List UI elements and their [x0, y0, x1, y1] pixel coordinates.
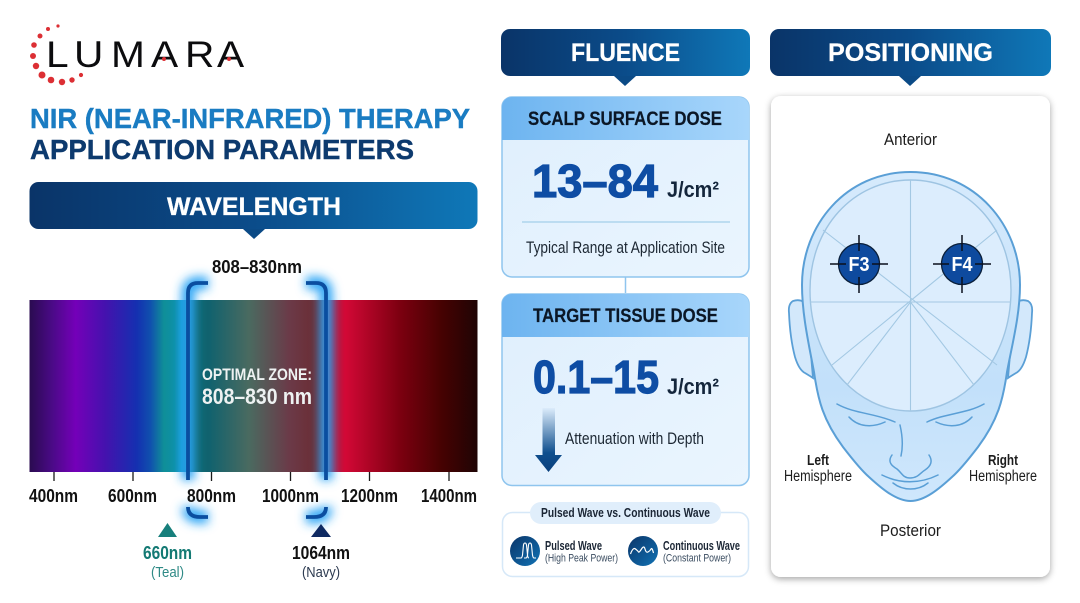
optimal zone label: OPTIMAL ZONE: [202, 365, 312, 384]
panel: pulsed vs continuous wave: (Constant Power) [663, 552, 731, 564]
panel: pulsed vs continuous wave: Continuous Wave [663, 538, 740, 553]
panel: scalp surface dose: J/cm² [667, 177, 719, 202]
range label: 808–830nm [212, 257, 302, 277]
marker: 1064nm navy [292, 524, 350, 581]
axis ticks and labels [29, 472, 477, 506]
title: NIR (NEAR-INFRARED) THERAPY [30, 103, 470, 134]
panel: scalp surface dose [502, 97, 749, 277]
panel: pulsed vs continuous wave: Pulsed Wave vs. Continuous Wave [541, 505, 710, 520]
marker: F4: F4 [952, 254, 973, 276]
label: left hemisphere: Left [807, 452, 829, 469]
axis ticks and labels: 1000nm [262, 486, 319, 506]
marker: 660nm teal: (Teal) [151, 564, 184, 581]
panel: scalp surface dose: 13–84 [532, 155, 658, 207]
panel: target tissue dose: Attenuation with Depth [565, 430, 704, 448]
spectrum bar [30, 300, 478, 472]
banner: fluence: FLUENCE [571, 39, 680, 67]
panel: target tissue dose: TARGET TISSUE DOSE [533, 306, 718, 327]
logo: Lumara: LUMARA [46, 35, 244, 76]
panel: pulsed vs continuous wave: (High Peak Power) [545, 552, 618, 564]
panel: target tissue dose [502, 294, 749, 486]
panel: scalp surface dose: SCALP SURFACE DOSE [528, 109, 722, 130]
marker: 660nm teal: 660nm [143, 543, 192, 563]
panel: pulsed vs continuous wave [502, 502, 748, 576]
icon: pulsed wave [510, 536, 540, 566]
banner: fluence [501, 29, 750, 86]
panel: target tissue dose: J/cm² [667, 374, 719, 399]
panel: positioning head diagram: Anterior [884, 130, 937, 149]
marker: F3 [830, 235, 888, 293]
label: left hemisphere [784, 452, 852, 485]
banner: wavelength [30, 182, 478, 239]
panel: positioning head diagram [771, 96, 1050, 577]
title [30, 103, 470, 165]
axis ticks and labels: 1400nm [421, 486, 477, 506]
label: left hemisphere: Hemisphere [784, 468, 852, 485]
axis ticks and labels: 800nm [187, 486, 236, 506]
marker: 1064nm navy: 1064nm [292, 543, 350, 563]
arrow: attenuation [535, 408, 562, 472]
panel: target tissue dose: 0.1–15 [533, 351, 659, 403]
axis ticks and labels: 400nm [29, 486, 78, 506]
ears [789, 300, 1032, 378]
scalp map [810, 180, 1011, 411]
logo: Lumara [30, 24, 244, 85]
panel: pulsed vs continuous wave: Pulsed Wave [545, 538, 602, 553]
optimal zone brackets [188, 283, 326, 517]
label: right hemisphere [969, 452, 1037, 485]
marker: F4 [933, 235, 991, 293]
banner: wavelength: WAVELENGTH [167, 193, 341, 221]
chart: wavelength spectrum [29, 257, 478, 581]
label: right hemisphere: Right [988, 452, 1018, 469]
marker: F3: F3 [848, 254, 870, 276]
optimal zone label [202, 365, 312, 409]
facial features [837, 404, 984, 489]
icon: head [789, 172, 1032, 501]
label: right hemisphere: Hemisphere [969, 468, 1037, 485]
label: posterior: Posterior [880, 521, 941, 540]
panel: scalp surface dose: Typical Range at Application Site [526, 239, 725, 257]
banner: positioning [770, 29, 1051, 86]
optimal zone label: 808–830 nm [202, 384, 312, 409]
marker: 1064nm navy: (Navy) [302, 564, 340, 581]
icon: continuous wave [628, 536, 658, 566]
connector between dose panels [624, 277, 626, 293]
axis ticks and labels: 600nm [108, 486, 157, 506]
title: APPLICATION PARAMETERS [30, 134, 414, 165]
head outline [802, 172, 1020, 501]
banner: positioning: POSITIONING [828, 39, 993, 67]
marker: 660nm teal [143, 523, 192, 581]
axis ticks and labels: 1200nm [341, 486, 398, 506]
